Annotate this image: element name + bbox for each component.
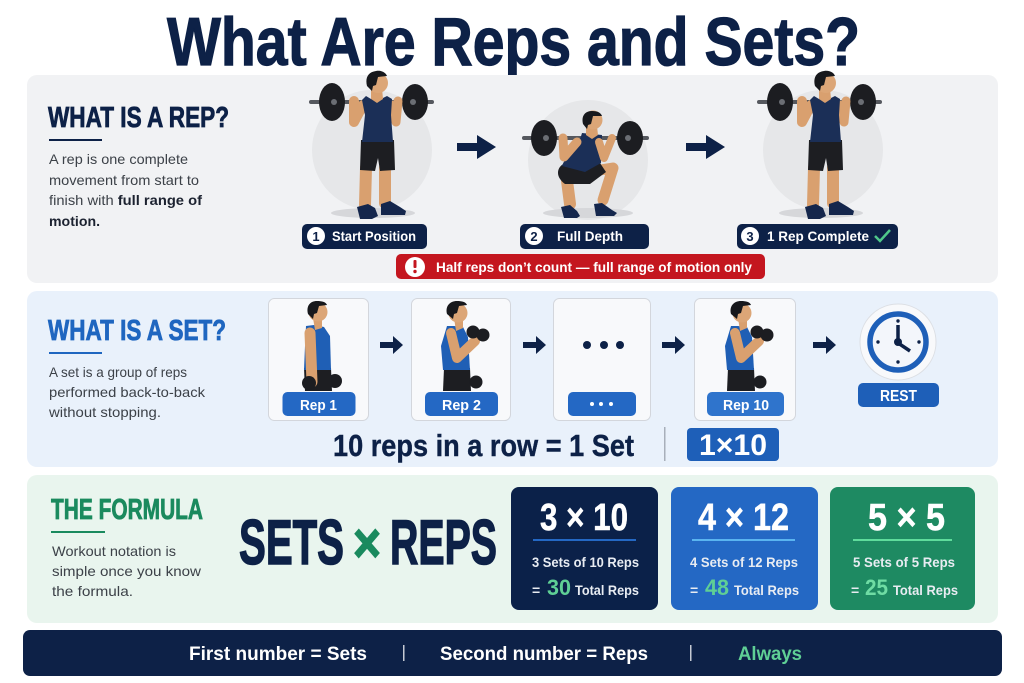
title: What Are Reps and Sets? xyxy=(167,4,860,80)
card: rep 10 xyxy=(694,298,796,420)
card: 5x5: Total Reps xyxy=(893,582,958,598)
sets x reps formula: SETS xyxy=(239,508,344,578)
rep heading: WHAT IS A REP? xyxy=(48,102,229,134)
card: rep 1 xyxy=(268,298,368,420)
sets x reps formula: × xyxy=(353,511,381,574)
set description: without stopping. xyxy=(48,404,161,420)
set description: performed back-to-back xyxy=(49,384,206,400)
rep description: motion. xyxy=(49,213,100,229)
warning banner: Half reps don’t count — full range of motion only xyxy=(436,259,752,275)
label: rest xyxy=(858,383,939,407)
label: full depth: Full Depth xyxy=(557,228,623,244)
card: 4x12: 48 xyxy=(705,575,729,600)
card: 5x5: = xyxy=(851,582,859,598)
label: rep complete: 1 Rep Complete xyxy=(767,228,869,244)
rep description: A rep is one complete xyxy=(49,151,188,167)
label: rest: REST xyxy=(880,388,917,405)
arrow xyxy=(457,135,496,159)
card: 4x12 xyxy=(671,487,818,610)
arrow xyxy=(686,135,725,159)
figure: start position xyxy=(309,71,434,219)
footer bar: Always xyxy=(738,644,802,665)
label: full depth: 2 xyxy=(530,229,538,244)
set heading: WHAT IS A SET? xyxy=(48,315,226,347)
icon: clock xyxy=(860,304,936,380)
warning banner xyxy=(396,254,765,279)
card: rep 2: Rep 2 xyxy=(442,397,481,414)
set equation: 10 reps in a row = 1 Set xyxy=(333,428,634,463)
card: 3x10: Total Reps xyxy=(575,582,639,598)
footer bar xyxy=(23,630,1002,676)
panel: the formula xyxy=(27,475,998,623)
card: 3x10 xyxy=(511,487,658,610)
formula description xyxy=(52,543,202,599)
arrow xyxy=(662,336,685,354)
arrow xyxy=(523,336,546,354)
formula description: Workout notation is xyxy=(52,543,176,559)
card: 5x5: 25 xyxy=(865,575,888,600)
label: start position xyxy=(302,224,427,249)
figure: rep complete xyxy=(757,71,883,219)
footer bar: First number = Sets xyxy=(189,644,367,665)
sets x reps formula xyxy=(239,508,497,578)
arrow xyxy=(380,336,403,354)
card: 4x12: Total Reps xyxy=(734,582,799,598)
rep description: finish with full range of xyxy=(49,192,202,208)
card: 5x5 xyxy=(830,487,975,610)
set description: A set is a group of reps xyxy=(49,364,187,380)
card: 3x10: = xyxy=(532,582,540,598)
formula description: simple once you know xyxy=(52,563,202,579)
figure: full depth squat xyxy=(522,100,649,220)
card: 4x12: 4 × 12 xyxy=(698,497,789,539)
card: 5x5: 5 Sets of 5 Reps xyxy=(853,554,955,570)
card: 3x10: 30 xyxy=(547,575,571,600)
card: 5x5: 5 × 5 xyxy=(868,497,945,539)
card: rep 2 xyxy=(412,298,510,420)
card: 4x12: = xyxy=(690,582,698,598)
formula description: the formula. xyxy=(52,583,133,599)
label: rep complete xyxy=(737,224,898,249)
sets x reps formula: REPS xyxy=(390,508,497,578)
card: 3x10: 3 × 10 xyxy=(540,497,628,539)
panel: what is a set xyxy=(27,291,998,467)
rep description: movement from start to xyxy=(49,172,199,188)
label: full depth xyxy=(520,224,649,249)
label: start position: Start Position xyxy=(332,228,416,244)
set description xyxy=(48,364,206,420)
label: start position: 1 xyxy=(312,229,320,244)
card: 3x10: 3 Sets of 10 Reps xyxy=(532,554,639,570)
card: rep 1: Rep 1 xyxy=(300,397,337,414)
arrow xyxy=(813,336,836,354)
panel: what is a rep xyxy=(27,71,998,283)
label: rep complete: 3 xyxy=(746,229,754,244)
formula heading: THE FORMULA xyxy=(51,494,203,526)
badge: 1x10: 1×10 xyxy=(699,429,767,462)
card: ellipsis xyxy=(554,298,650,420)
rep description xyxy=(49,151,202,229)
card: 4x12: 4 Sets of 12 Reps xyxy=(690,554,798,570)
footer bar: Second number = Reps xyxy=(440,644,648,665)
card: rep 10: Rep 10 xyxy=(723,397,769,414)
